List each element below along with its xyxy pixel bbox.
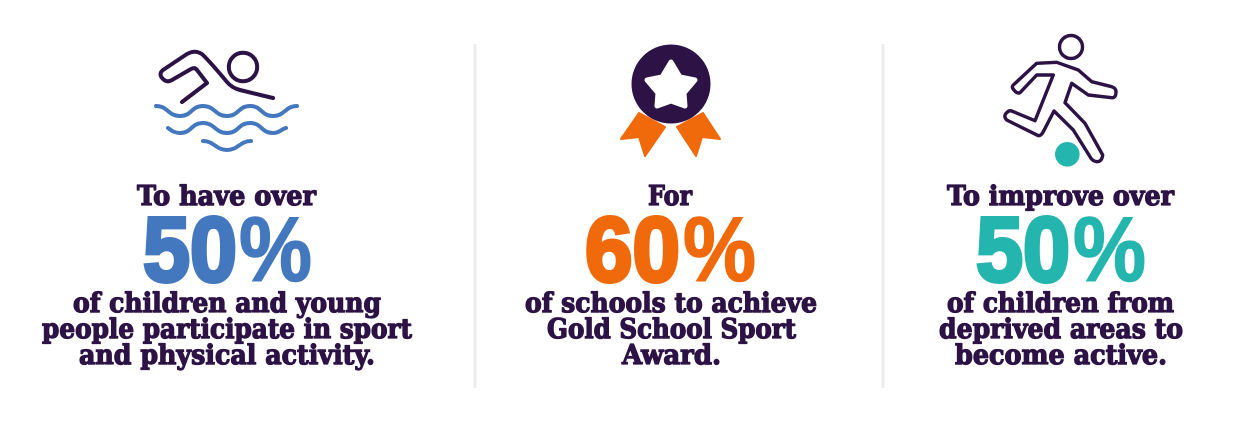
- text block: schools description: [525, 288, 817, 371]
- icon: footballer: [1005, 36, 1116, 167]
- figure: 60 percent: %: [683, 199, 756, 301]
- figure: 60 percent: 60: [585, 199, 680, 301]
- figure: 50 percent: 50: [976, 199, 1070, 301]
- panel: schools target: [525, 44, 817, 371]
- icon: award rosette: [621, 44, 720, 156]
- icon: swimmer: [156, 52, 297, 150]
- text block: deprived areas description: deprived areas to: [939, 314, 1183, 345]
- text block: deprived areas description: become active.: [955, 340, 1167, 371]
- text block: schools description: of schools to achieve: [525, 288, 817, 319]
- figure: 50 percent: %: [239, 199, 312, 301]
- text block: participation description: people participate in sport: [42, 314, 412, 345]
- figure: 50 percent: [143, 199, 312, 301]
- heading: for: For: [648, 181, 693, 212]
- heading: to improve over: To improve over: [947, 181, 1175, 212]
- text block: deprived areas description: [939, 288, 1183, 371]
- panel: participation target: [42, 52, 412, 371]
- text block: schools description: Gold School Sport: [547, 314, 796, 345]
- text block: participation description: and physical activity.: [79, 340, 375, 371]
- text block: participation description: of children and young: [73, 288, 381, 319]
- figure: 60 percent: [585, 199, 756, 301]
- panel: deprived areas target: [939, 36, 1183, 371]
- text block: deprived areas description: of children from: [947, 288, 1174, 319]
- figure: 50 percent: 50: [143, 199, 237, 301]
- text block: participation description: [42, 288, 412, 371]
- text block: schools description: Award.: [621, 340, 721, 371]
- figure: 50 percent: %: [1073, 199, 1146, 301]
- heading: to have over: To have over: [137, 181, 317, 212]
- figure: 50 percent: [976, 199, 1146, 301]
